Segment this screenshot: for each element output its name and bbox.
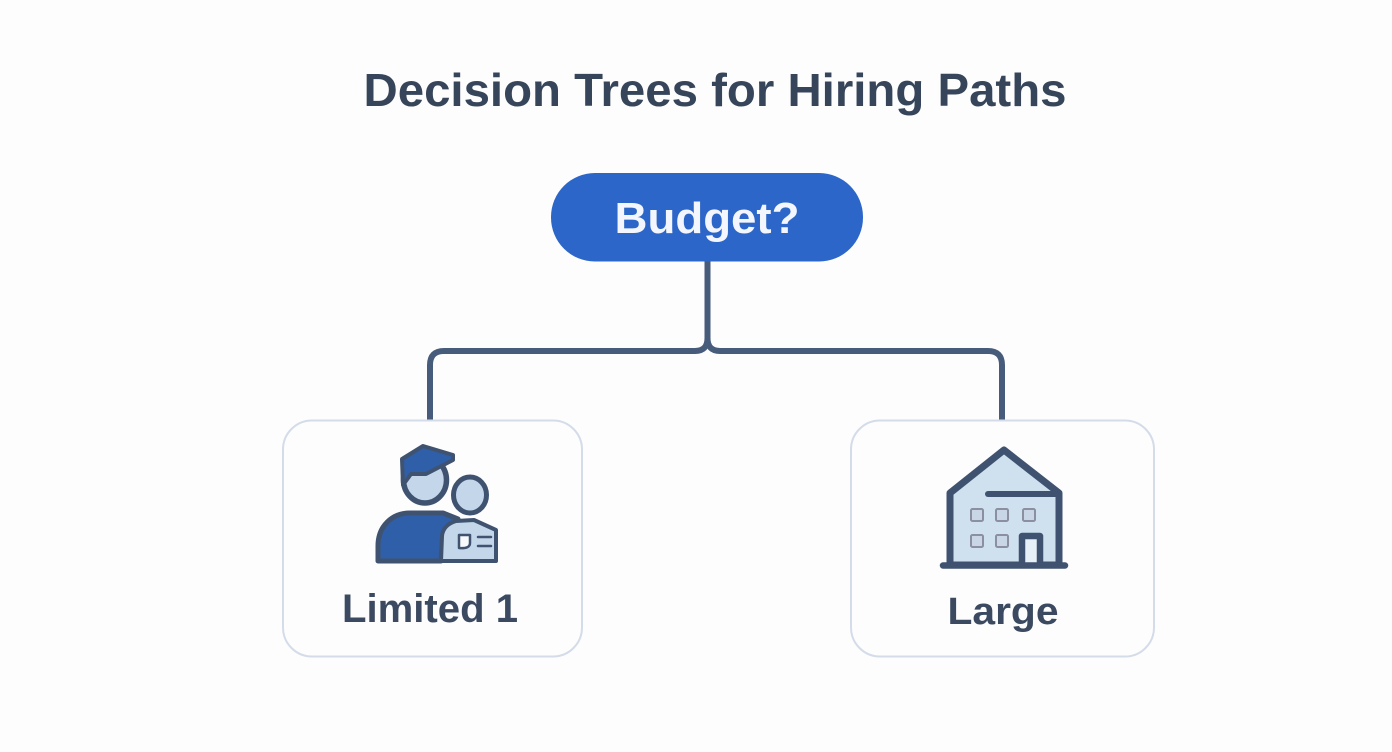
decision node: Budget?: Budget? xyxy=(614,194,800,243)
icon: building xyxy=(943,450,1065,566)
decision node: Budget? xyxy=(551,173,863,262)
title: Decision Trees for Hiring Paths xyxy=(364,64,1066,116)
label: Large: Large xyxy=(948,591,1058,633)
label: Limited 1: Limited 1 xyxy=(342,587,518,631)
icon: two people xyxy=(378,446,496,561)
panel: limited xyxy=(283,420,582,656)
panel: large xyxy=(851,420,1154,656)
connector lines xyxy=(430,258,1002,421)
